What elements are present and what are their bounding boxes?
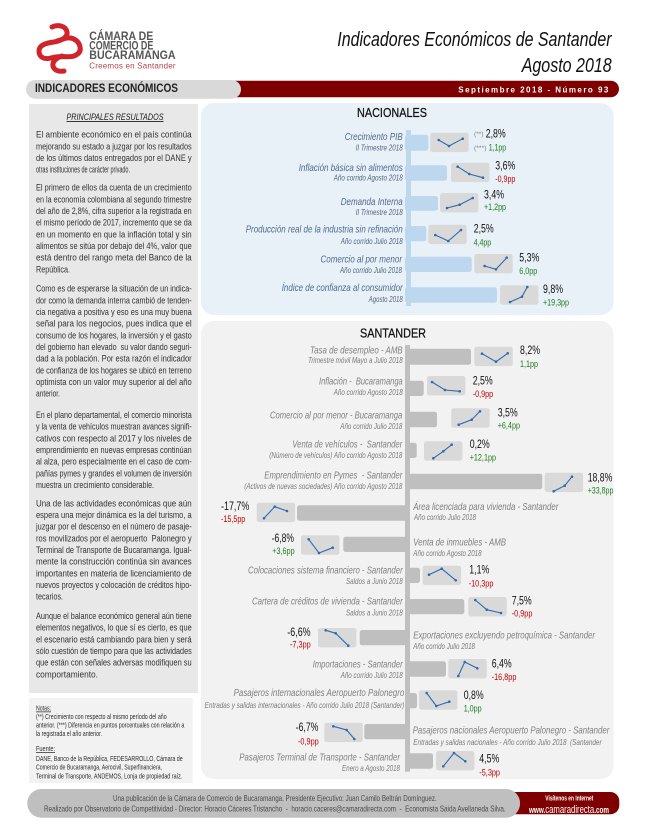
header band — [26, 80, 619, 99]
text block: paragraph 4: muestra un crecimiento considerable. — [36, 480, 154, 490]
indicator: crecimiento PIB: (**) — [474, 131, 484, 138]
footer credits pill — [27, 789, 520, 818]
logo wordmark: Creemos en Santander — [89, 62, 176, 71]
indicator: inflación básica sin alimentos — [299, 158, 516, 185]
text block: paragraph 1: otras instituciones de carácter privado. — [36, 165, 130, 175]
indicator: área licenciada para vivienda: -15,5pp — [221, 514, 245, 525]
indicator: venta de inmuebles: Venta de inmuebles - AMB — [413, 536, 506, 548]
indicator: comercio al por menor: Año corrido Julio 2018 — [339, 266, 402, 275]
indicator: demanda interna: II Trimestre 2018 — [356, 208, 403, 217]
indicator: pasajeros nacionales: Entradas y salidas nacionales - Año corrido Julio 2018 (Santander — [413, 738, 602, 747]
indicator: crecimiento PIB — [345, 126, 506, 154]
heading: santander: SANTANDER — [360, 326, 426, 340]
text block: paragraph 4: al alza, pero especialmente en el caso de com- — [36, 457, 192, 467]
indicator: comercio al por menor Bucaramanga: 3,5% — [498, 406, 518, 420]
text block: paragraph 4 — [36, 410, 192, 490]
indicator: emprendimiento en pymes: 18,8% — [588, 470, 613, 484]
indicator: pasajeros nacionales: -6,7% — [296, 720, 319, 734]
indicator: inflación Bucaramanga: 2,5% — [473, 374, 493, 388]
indicator: tasa de desempleo: Tasa de desempleo - AMB — [310, 344, 403, 356]
footer link pill: www.camaradirecta.com — [528, 804, 609, 816]
text block: paragraph 5: tecarios. — [36, 592, 63, 602]
indicator: tasa de desempleo: Trimestre móvil Mayo a Julio 2018 — [308, 356, 403, 365]
text block: paragraph 5: ros movilizados por el aeropuerto Palonegro y — [36, 533, 192, 543]
indicator: pasajeros terminal de transporte: Enero a Agosto 2018 — [342, 764, 400, 773]
text block: paragraph 5 — [35, 498, 192, 602]
indicator: venta de vehículos — [269, 437, 496, 463]
footer credits pill: Una publicación de la Cámara de Comercio de Bucaramanga. Presidente Ejecutivo: Juan Camilo Beltrán Domínguez. — [113, 793, 437, 803]
indicator: colocaciones sistema financiero: Colocaciones sistema financiero - Santander — [248, 564, 403, 576]
indicator: comercio al por menor Bucaramanga: +6,4pp — [498, 421, 520, 432]
text block: paragraph 2: República. — [36, 264, 70, 274]
indicator: pasajeros nacionales — [296, 720, 610, 747]
indicator: pasajeros terminal de transporte: -5,3pp — [479, 767, 500, 778]
text block: notas: la registrada el año anterior. — [36, 729, 102, 738]
indicator: crecimiento PIB: 2,8% — [486, 126, 506, 140]
indicator: venta de inmuebles — [272, 531, 506, 558]
indicator: inflación básica sin alimentos: -0,9pp — [495, 174, 515, 185]
indicator: pasajeros terminal de transporte: 4,5% — [479, 752, 500, 766]
indicator: tasa de desempleo: 8,2% — [520, 343, 540, 357]
text block: paragraph 3: cia negativa a positiva y eso es una muy buena — [36, 307, 192, 317]
heading: principales resultados: PRINCIPALES RESULTADOS — [66, 112, 164, 122]
indicator: crecimiento PIB: 1,1pp — [489, 142, 506, 154]
text block: paragraph 2: del año de 2,8%, cifra superior a la registrada en — [36, 206, 192, 216]
logo wordmark: CÁMARA DE — [89, 30, 154, 43]
text block: paragraph 3: dor como la demanda interna cambió de tenden- — [36, 295, 192, 305]
footer — [27, 789, 619, 818]
indicator: área licenciada para vivienda — [221, 499, 559, 525]
text block: paragraph 6: comportamiento. — [36, 669, 98, 679]
indicator: inflación básica sin alimentos: Inflación básica sin alimentos — [299, 162, 403, 174]
text block: fuente — [36, 744, 183, 780]
indicator: emprendimiento en pymes — [244, 469, 613, 497]
title: Agosto 2018 — [520, 54, 612, 77]
indicator: venta de vehículos: +12,1pp — [470, 452, 496, 463]
indicator: índice de confianza al consumidor: +19,3pp — [543, 298, 569, 308]
indicator: tasa de desempleo — [308, 343, 540, 370]
indicator: cartera de créditos de vivienda: Cartera de créditos de vivienda - Santander — [252, 595, 403, 607]
indicator: venta de inmuebles: Año corrido Agosto 2018 — [413, 549, 482, 558]
indicator: crecimiento PIB: Crecimiento PIB — [345, 131, 403, 143]
indicator: área licenciada para vivienda: -17,7% — [221, 499, 250, 513]
indicator: comercio al por menor Bucaramanga — [270, 406, 520, 432]
text block: paragraph 2: El primero de ellos da cuenta de un crecimiento — [36, 183, 192, 193]
text block: paragraph 2: en la economía colombiana al segundo trimestre — [36, 194, 192, 204]
indicator: importaciones: Importaciones - Santander — [313, 658, 403, 670]
chart axis — [405, 345, 410, 772]
indicator: pasajeros nacionales: -0,9pp — [298, 736, 319, 747]
indicator: demanda interna: 3,4% — [484, 188, 504, 202]
indicator: inflación básica sin alimentos: 3,6% — [495, 158, 516, 172]
text block: paragraph 3: consumo de los hogares, la inversión y el gasto — [36, 330, 192, 340]
header band: Septiembre 2018 - Número 93 — [458, 85, 609, 94]
text block: paragraph 1 — [36, 130, 192, 175]
text block: paragraph 4: cativos con respecto al 2017 y los niveles de — [36, 433, 192, 443]
indicator: inflación Bucaramanga: -0,9pp — [473, 389, 493, 400]
indicator: inflación Bucaramanga: Año corrido Agosto 2018 — [333, 388, 403, 397]
indicator: importaciones — [313, 656, 516, 683]
indicator: inflación Bucaramanga — [319, 374, 493, 400]
panel: nacionales — [201, 103, 614, 315]
text block: notas: (**) Crecimiento con respecto al mismo período del año — [36, 712, 167, 721]
text block: paragraph 3: señal para los negocios, pues indica que el — [36, 319, 192, 329]
text block: fuente: Fuente: — [36, 744, 55, 753]
indicator: crecimiento PIB: II Trimestre 2018 — [356, 144, 403, 152]
indicator: emprendimiento en pymes: Emprendimiento en Pymes - Santander — [264, 469, 403, 481]
text block: paragraph 4: emprendimiento en nuevas empresas continúan — [36, 445, 192, 455]
indicator: importaciones: 6,4% — [492, 656, 512, 670]
text block: paragraph 3: optimista con un valor muy superior al del año — [36, 377, 192, 387]
indicator: demanda interna — [341, 188, 506, 217]
indicator: exportaciones: Año corrido Julio 2018 — [413, 642, 475, 651]
indicator: comercio al por menor: 6,0pp — [519, 266, 537, 277]
indicator: venta de vehículos: 0,2% — [470, 437, 490, 451]
text block: paragraph 6 — [36, 611, 192, 679]
footer link pill — [500, 792, 619, 816]
indicator: comercio al por menor — [320, 250, 540, 277]
indicator: venta de inmuebles: -6,8% — [272, 531, 294, 545]
indicator: comercio al por menor Bucaramanga: Comercio al por menor - Bucaramanga — [270, 409, 402, 421]
text block: paragraph 6: sólo cuestión de tiempo para que las actividades — [36, 646, 192, 656]
indicator: índice de confianza al consumidor: Agosto 2018 — [368, 295, 403, 304]
text block: paragraph 1: El ambiente económico en el país continúa — [36, 130, 192, 140]
indicator: pasajeros internacionales: 0,8% — [464, 688, 484, 702]
indicator: índice de confianza al consumidor: Índice de confianza al consumidor — [282, 281, 403, 294]
text block: paragraph 6: elementos negativos, lo que sí es cierto, es que — [36, 623, 192, 633]
text block: paragraph 2: el mismo período de 2017, incremento que se da — [36, 218, 192, 228]
indicator: colocaciones sistema financiero: -10,3pp — [469, 578, 493, 589]
indicator: pasajeros internacionales: Entradas y salidas internacionales - Año corrido Julio 2018 (Santander) — [205, 701, 405, 710]
text block: paragraph 6: que están con señales adversas modifiquen su — [36, 658, 192, 668]
text block: notas: Notas: — [36, 704, 51, 712]
indicator: inflación Bucaramanga: Inflación - Bucaramanga — [319, 375, 403, 387]
text block: paragraph 2: en un momento en que la inflación total y sin — [36, 229, 192, 239]
indicator: demanda interna: +1,2pp — [484, 202, 506, 213]
indicator: índice de confianza al consumidor: 9,8% — [543, 282, 563, 296]
indicator: colocaciones sistema financiero — [248, 562, 493, 589]
indicator: producción real de la industria: Año corrido Julio 2018 — [340, 237, 403, 246]
indicator: emprendimiento en pymes: (Activos de nuevas sociedades) Año corrido Agosto 2018 — [244, 482, 403, 491]
text block: paragraph 3: de confianza de los hogares se ubicó en terreno — [36, 365, 192, 375]
indicator: venta de vehículos: Venta de vehículos - Santander — [292, 438, 403, 450]
indicator: índice de confianza al consumidor — [282, 281, 569, 308]
indicator: cartera de créditos de vivienda: -0,9pp — [512, 608, 532, 619]
panel: santander — [201, 321, 614, 779]
indicator: comercio al por menor: 5,3% — [519, 250, 540, 264]
text block: paragraph 2: está dentro del rango meta del Banco de la — [36, 253, 192, 263]
indicator: cartera de créditos de vivienda: Saldos a Junio 2018 — [346, 608, 403, 618]
text block: paragraph 5: Terminal de Transporte de Bucaramanga. Igual- — [36, 545, 192, 555]
indicator: producción real de la industria: Producción real de la industria sin refinación — [246, 224, 403, 236]
indicator: exportaciones: -7,3pp — [290, 639, 311, 650]
text block: paragraph 5: espera una mejor dinámica es la del turismo, a — [36, 510, 192, 520]
indicator: venta de vehículos: (Número de vehículos) Año corrido Agosto 2018 — [269, 451, 403, 460]
indicator: pasajeros internacionales: Pasajeros internacionales Aeropuerto Palonegro — [234, 687, 404, 699]
text block: paragraph 5: importantes en materia de licenciamiento de — [36, 568, 192, 578]
chart axis — [406, 130, 411, 306]
text block: fuente: DANE, Banco de la República, FEDESARROLLO, Cámara de — [36, 754, 183, 763]
indicator: cartera de créditos de vivienda: 7,5% — [512, 594, 532, 608]
indicator: crecimiento PIB: (***) — [474, 145, 486, 152]
indicator: exportaciones: -6,6% — [287, 625, 311, 639]
text block: notas — [36, 704, 185, 738]
text block: paragraph 4: y la venta de vehículos muestran avances signifi- — [36, 422, 192, 432]
text block: paragraph 5: mente la construcción continúa sin avances — [36, 557, 192, 567]
indicator: colocaciones sistema financiero: 1,1% — [469, 562, 490, 576]
text block: paragraph 3: dad a la población. Por esta razón el indicador — [36, 354, 192, 364]
indicator: inflación básica sin alimentos: Año corrido Agosto 2018 — [333, 174, 403, 182]
indicator: pasajeros internacionales: 1,0pp — [464, 704, 482, 715]
indicator: emprendimiento en pymes: +33,8pp — [588, 486, 613, 497]
logo wordmark: COMERCIO DE — [89, 40, 154, 52]
text block: fuente: Terminal de Transporte, ANDEMOS, Lonja de propiedad raíz. — [36, 772, 182, 780]
indicator: tasa de desempleo: 1,1pp — [520, 359, 538, 370]
indicator: producción real de la industria: 4,4pp — [474, 238, 491, 248]
logo wordmark: BUCARAMANGA — [89, 50, 176, 62]
indicator: comercio al por menor: Comercio al por menor — [320, 254, 402, 266]
text block: paragraph 3: anterior. — [36, 389, 60, 399]
indicator: pasajeros terminal de transporte — [239, 751, 500, 778]
text block: paragraph 5: nuevos proyectos y colocación de créditos hipo- — [36, 580, 192, 590]
indicator: producción real de la industria: 2,5% — [474, 222, 494, 236]
text block: notas: anterior. (***) Diferencia en puntos porcentuales con relación a — [36, 720, 185, 730]
title — [337, 28, 613, 77]
text block: paragraph 5: juzgar por el descenso en el número de pasaje- — [35, 522, 192, 532]
footer link pill: Visítenos en Internet — [545, 796, 594, 802]
indicator: comercio al por menor Bucaramanga: Año corrido Julio 2018 — [340, 422, 403, 431]
indicator: colocaciones sistema financiero: Saldos a Junio 2018 — [346, 577, 403, 586]
text block: paragraph 5: Una de las actividades económicas que aún — [36, 498, 192, 508]
indicator: exportaciones — [287, 625, 595, 651]
text block: paragraph 1: mejorando su estado a juzgar por los resultados — [36, 141, 192, 151]
logo wordmark — [89, 30, 176, 71]
text block: paragraph 4: pañías pymes y grandes el volumen de inversión — [36, 468, 192, 478]
text block: paragraph 6: el escenario está cambiando para bien y será — [36, 634, 192, 644]
text block: paragraph 1: de los últimos datos entregados por el DANE y — [36, 153, 192, 163]
indicator: pasajeros internacionales — [205, 687, 484, 715]
indicator: cartera de créditos de vivienda — [252, 594, 532, 619]
text block: paragraph 4: En el plano departamental, el comercio minorista — [36, 410, 192, 420]
logo: Cámara de Comercio de Bucaramanga — [39, 26, 176, 71]
header band: INDICADORES ECONÓMICOS — [35, 82, 178, 95]
panel: principales resultados — [29, 104, 198, 693]
panel: notas y fuente — [29, 698, 193, 783]
indicator: demanda interna: Demanda Interna — [341, 196, 403, 208]
text block: paragraph 2 — [36, 183, 192, 274]
text block: fuente: Comercio de Bucaramanga, Aerocivil, Superfinanciera, — [36, 762, 162, 772]
indicator: producción real de la industria — [246, 222, 494, 248]
indicator: importaciones: -16,8pp — [492, 672, 516, 683]
indicator: importaciones: Año corrido Julio 2018 — [340, 671, 403, 680]
indicator: área licenciada para vivienda: Año corrido Julio 2018 — [413, 513, 476, 522]
text block: paragraph 3: Como es de esperarse la situación de un indica- — [36, 284, 192, 294]
indicator: venta de inmuebles: +3,6pp — [272, 546, 295, 557]
indicator: área licenciada para vivienda: Área licenciada para vivienda - Santander — [413, 500, 559, 513]
text block: paragraph 3: del gobierno han elevado su valor dando seguri- — [36, 342, 192, 352]
text block: paragraph 3 — [36, 284, 192, 399]
indicator: pasajeros terminal de transporte: Pasajeros Terminal de Transporte - Santander — [239, 751, 400, 763]
text block: paragraph 2: alimentos se sitúa por debajo del 4%, valor que — [36, 241, 192, 251]
icon: red knot — [39, 26, 80, 71]
text block: paragraph 6: Aunque el balance económico general aún tiene — [36, 611, 192, 621]
heading: nacionales: NACIONALES — [357, 105, 427, 120]
